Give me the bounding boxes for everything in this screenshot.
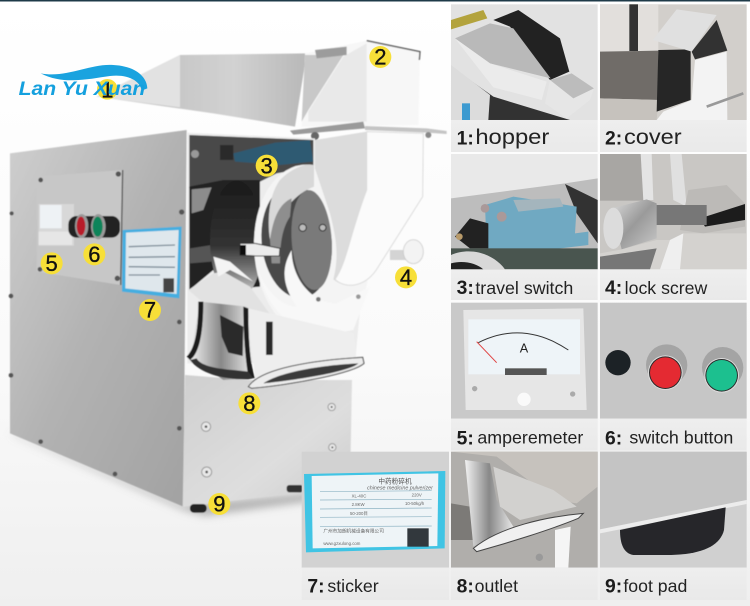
badge 6 — [83, 242, 105, 267]
panel: cover photo — [600, 4, 747, 120]
detail panels, bottom rows — [302, 303, 747, 600]
panel: travel switch photo — [451, 154, 598, 269]
panel: lock screw photo — [600, 154, 747, 269]
label: 9 foot pad — [600, 568, 747, 600]
logo swoosh — [41, 65, 147, 91]
label: 5 amperemeter — [451, 419, 598, 451]
label: 4 lock screw: 4: — [605, 278, 622, 299]
badge 2 — [369, 45, 391, 70]
panel: sticker photo: www.gzxulong.com — [323, 541, 361, 546]
badge 5: 5 — [46, 251, 58, 276]
floor shadow — [10, 433, 350, 516]
label: 5 amperemeter: amperemeter — [477, 427, 583, 447]
panel: sticker photo — [302, 452, 449, 568]
label: 6 switch button: switch button — [629, 427, 733, 447]
badge 7 — [139, 298, 161, 323]
badge 1 — [97, 77, 118, 102]
panel: hopper photo — [451, 4, 598, 120]
top edge strip — [0, 0, 750, 2]
logo — [19, 65, 147, 100]
panel: amperemeter photo — [451, 303, 598, 419]
ammeter on machine — [39, 204, 74, 246]
panel: outlet photo — [451, 452, 598, 568]
badge 9 — [208, 492, 230, 517]
badge 1: 1 — [101, 77, 113, 102]
detail panels, top rows — [451, 4, 747, 300]
panel: sticker photo: chinese medicine pulverizer — [367, 485, 433, 491]
label: 4 lock screw — [600, 269, 747, 300]
hopper — [97, 53, 307, 127]
label: 8 outlet: 8: — [457, 577, 474, 598]
panel: sticker photo: 2.8KW — [352, 502, 366, 507]
badge 6: 6 — [88, 242, 100, 267]
lower front panel — [183, 375, 352, 513]
panel: sticker photo: 50-200目 — [350, 511, 368, 517]
label: 6 switch button — [600, 419, 747, 451]
label: 2 cover: 2: — [605, 129, 622, 150]
label: 2 cover — [600, 120, 747, 152]
label: 2 cover: cover — [624, 125, 682, 149]
badge 3 — [256, 153, 278, 178]
number badges — [41, 45, 417, 517]
label: 1 hopper: hopper — [475, 125, 549, 149]
label: 8 outlet — [451, 568, 598, 600]
badge 4 — [395, 265, 417, 290]
badge 2: 2 — [374, 45, 386, 70]
label: 8 outlet: outlet — [475, 576, 518, 596]
panel: sticker photo: 中药粉碎机 — [378, 476, 412, 485]
label: 7 sticker: 7: — [307, 577, 325, 598]
outlet — [187, 302, 364, 388]
label: 9 foot pad: 9: — [605, 577, 622, 598]
label: 6 switch button: 6: — [605, 429, 622, 450]
badge 3: 3 — [261, 153, 273, 178]
lock screw on machine — [390, 240, 423, 264]
label: 3 travel switch: travel switch — [475, 278, 573, 298]
panel: foot pad photo — [600, 452, 747, 568]
cover — [290, 41, 447, 140]
label: 9 foot pad: foot pad — [623, 576, 687, 596]
panel: sticker photo: 广州市加朗机械设备有限公司 — [323, 527, 384, 534]
badge 9: 9 — [213, 492, 225, 517]
panel: sticker photo: XL-40C — [352, 493, 366, 498]
machine illustration — [9, 41, 447, 516]
badge 8: 8 — [243, 391, 255, 416]
label: 1 hopper: 1: — [457, 129, 474, 150]
panel: amperemeter photo: A — [520, 342, 529, 356]
panel: sticker photo: 10-50kg/h — [405, 501, 425, 506]
label: 5 amperemeter: 5: — [457, 429, 474, 450]
control buttons on machine — [68, 214, 120, 239]
badge 7: 7 — [144, 298, 156, 323]
label: 4 lock screw: lock screw — [625, 278, 708, 298]
label: 7 sticker — [302, 568, 449, 600]
sticker on machine — [122, 227, 182, 298]
panel: sticker photo: 220V — [412, 493, 422, 498]
side panel — [9, 130, 187, 507]
grinder housing — [187, 133, 378, 363]
label: 3 travel switch — [451, 269, 598, 300]
label: 1 hopper — [451, 120, 598, 152]
logo text: Lan Yu Xuan — [19, 79, 145, 100]
label: 7 sticker: sticker — [327, 576, 379, 596]
label: 3 travel switch: 3: — [457, 278, 474, 299]
panel: switch button photo — [600, 303, 747, 419]
badge 5 — [41, 251, 63, 276]
chute — [315, 132, 423, 285]
badge 4: 4 — [400, 265, 412, 290]
badge 8 — [238, 391, 260, 416]
